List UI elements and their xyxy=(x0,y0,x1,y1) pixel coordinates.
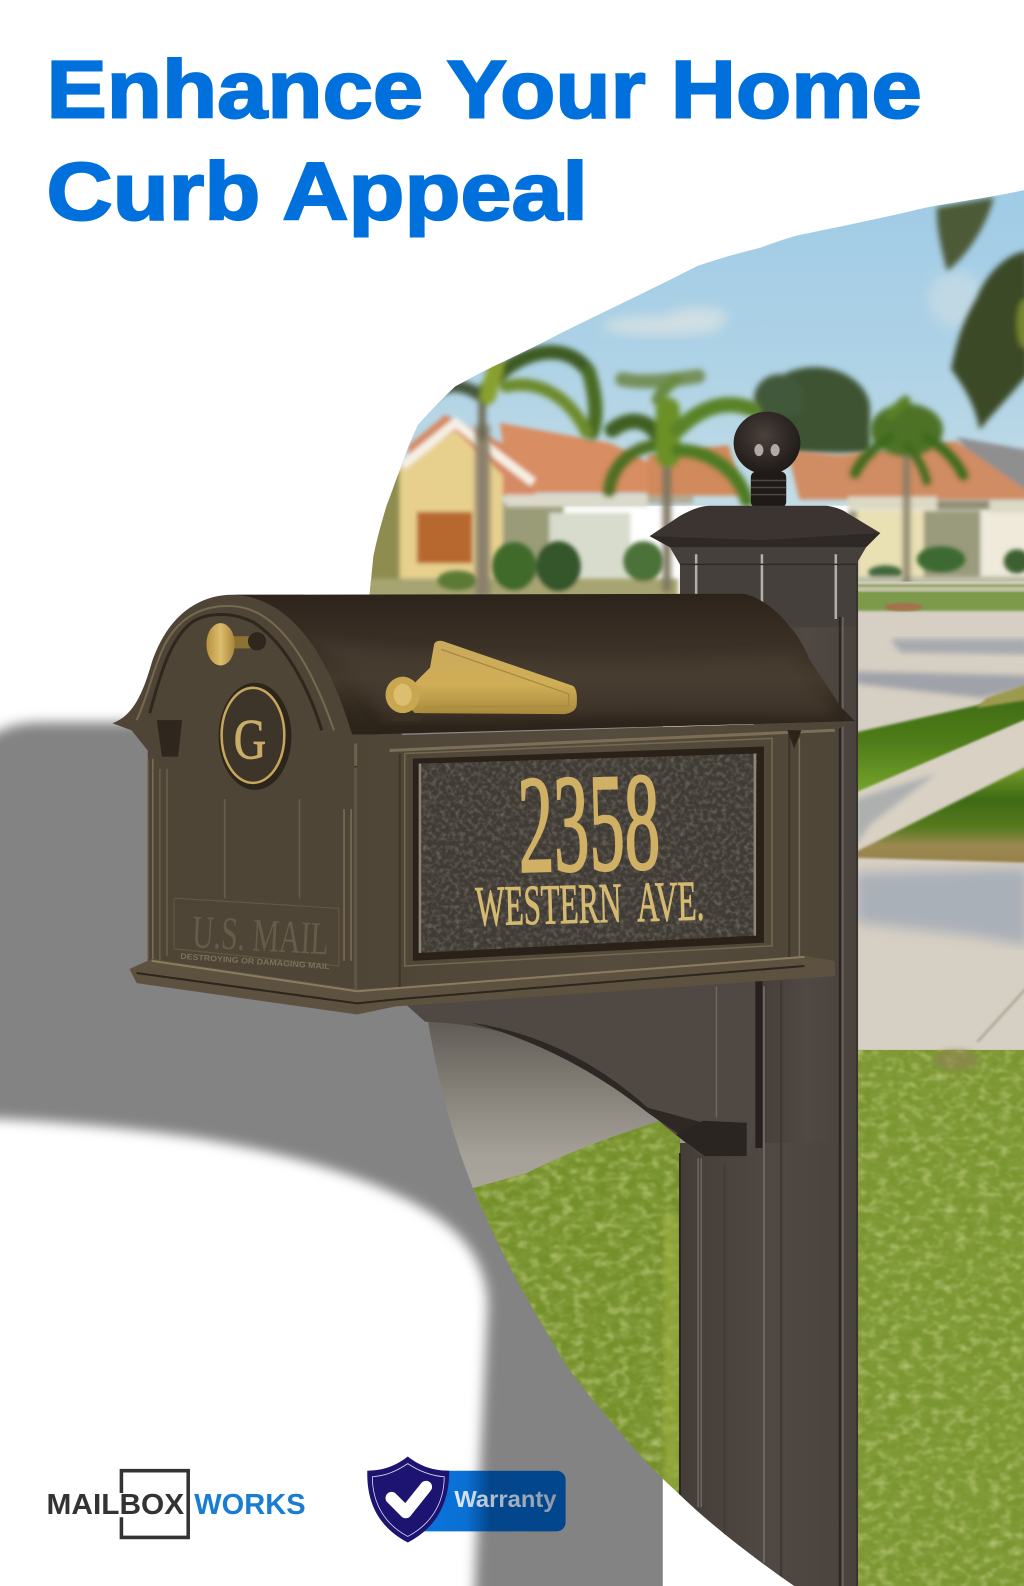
shield icon xyxy=(367,1457,449,1543)
road shadows xyxy=(890,639,1024,654)
warranty label: Warranty xyxy=(454,1486,557,1512)
grass triangle xyxy=(856,766,1024,863)
logo WORKS: WORKS xyxy=(194,1489,306,1521)
white garage xyxy=(549,513,630,586)
white trim gable xyxy=(403,423,533,482)
mulch and trunk base xyxy=(884,603,923,611)
address plaque xyxy=(413,745,764,961)
embossed small line: DESTROYING OR DAMAGING MAIL xyxy=(180,952,330,971)
title xyxy=(47,44,922,237)
right street and road xyxy=(856,582,1024,1067)
cast shadow of mailbox xyxy=(0,722,708,1586)
roof xyxy=(235,594,855,734)
base molding xyxy=(130,956,835,1015)
logo square xyxy=(121,1471,188,1537)
tree three xyxy=(855,401,963,604)
title line one: Enhance Your Home xyxy=(47,44,922,135)
logo: Mailbox Works xyxy=(47,1471,306,1537)
post with finial xyxy=(650,412,880,1586)
house number: 2358 xyxy=(516,745,662,903)
houses xyxy=(366,415,1024,592)
right house walls xyxy=(846,508,984,580)
fascia xyxy=(506,495,648,507)
pavement beneath the bracket xyxy=(428,1022,686,1188)
sky xyxy=(364,182,1024,506)
grass strip xyxy=(856,694,1024,793)
grey-green wall xyxy=(503,503,564,589)
street name: WESTERN AVE. xyxy=(475,870,705,938)
lawn by curb xyxy=(856,585,1024,611)
orange shutter xyxy=(417,512,473,563)
red flag xyxy=(386,641,577,721)
tree one xyxy=(430,352,595,597)
support bracket xyxy=(397,961,761,1156)
right palm fronds xyxy=(937,197,1024,430)
grass right xyxy=(856,1050,1024,1586)
left olive wall xyxy=(366,470,403,592)
clouds xyxy=(602,270,985,336)
monogram medallion: G xyxy=(234,710,266,772)
title line two: Curb Appeal xyxy=(47,147,588,237)
driveway shade xyxy=(856,868,1024,946)
finial ball xyxy=(734,412,800,508)
shrubs and ground xyxy=(370,538,1024,594)
warranty badge xyxy=(367,1457,566,1543)
mailbox xyxy=(112,594,855,1015)
palm trees xyxy=(430,352,963,604)
distant trees xyxy=(754,367,870,453)
embossed U.S. MAIL text: U.S. MAIL xyxy=(191,907,330,965)
sidewalk xyxy=(858,719,1024,794)
background photo: street with houses xyxy=(364,182,1024,1586)
badge bar xyxy=(415,1471,566,1531)
monogram medallion xyxy=(219,683,291,790)
mailbox left face with arch xyxy=(112,595,405,996)
roofs xyxy=(787,441,1024,500)
far-right grey roof xyxy=(956,437,1024,492)
yellow gable wall xyxy=(400,431,503,582)
post shaft xyxy=(680,546,857,1586)
front panel xyxy=(357,721,855,1011)
roof highlight xyxy=(304,637,835,720)
grass lower middle xyxy=(473,1121,680,1495)
post cap xyxy=(650,506,880,619)
gold knob xyxy=(206,623,266,666)
tree two xyxy=(609,376,754,592)
logo MAILBOX: MAILBOX xyxy=(47,1489,184,1521)
